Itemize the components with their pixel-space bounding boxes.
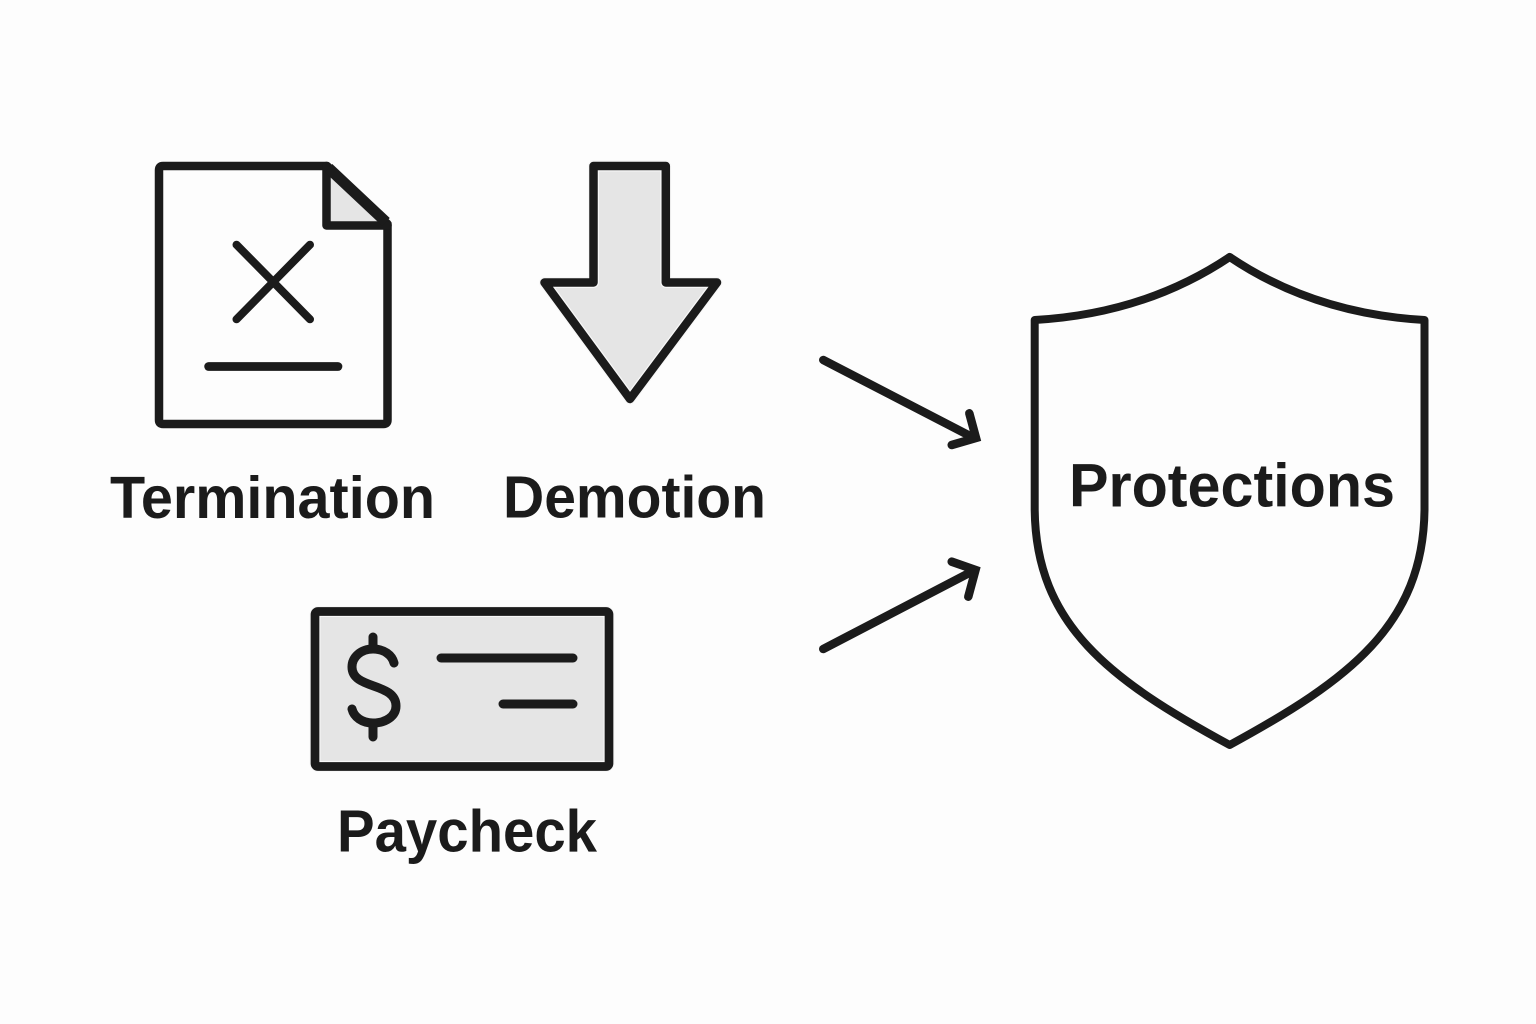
icon: paycheck [315, 612, 609, 766]
icon: termination document [159, 166, 388, 424]
label: Protections: Protections [1069, 452, 1395, 520]
arrow: lower arrow to shield [823, 562, 976, 649]
arrow: upper arrow to shield [823, 360, 976, 445]
label: Demotion: Demotion [503, 464, 766, 530]
label: Termination: Termination [110, 465, 435, 531]
icon: demotion down arrow [544, 166, 717, 399]
label: Paycheck: Paycheck [337, 798, 597, 864]
icon: shield [1035, 257, 1424, 745]
